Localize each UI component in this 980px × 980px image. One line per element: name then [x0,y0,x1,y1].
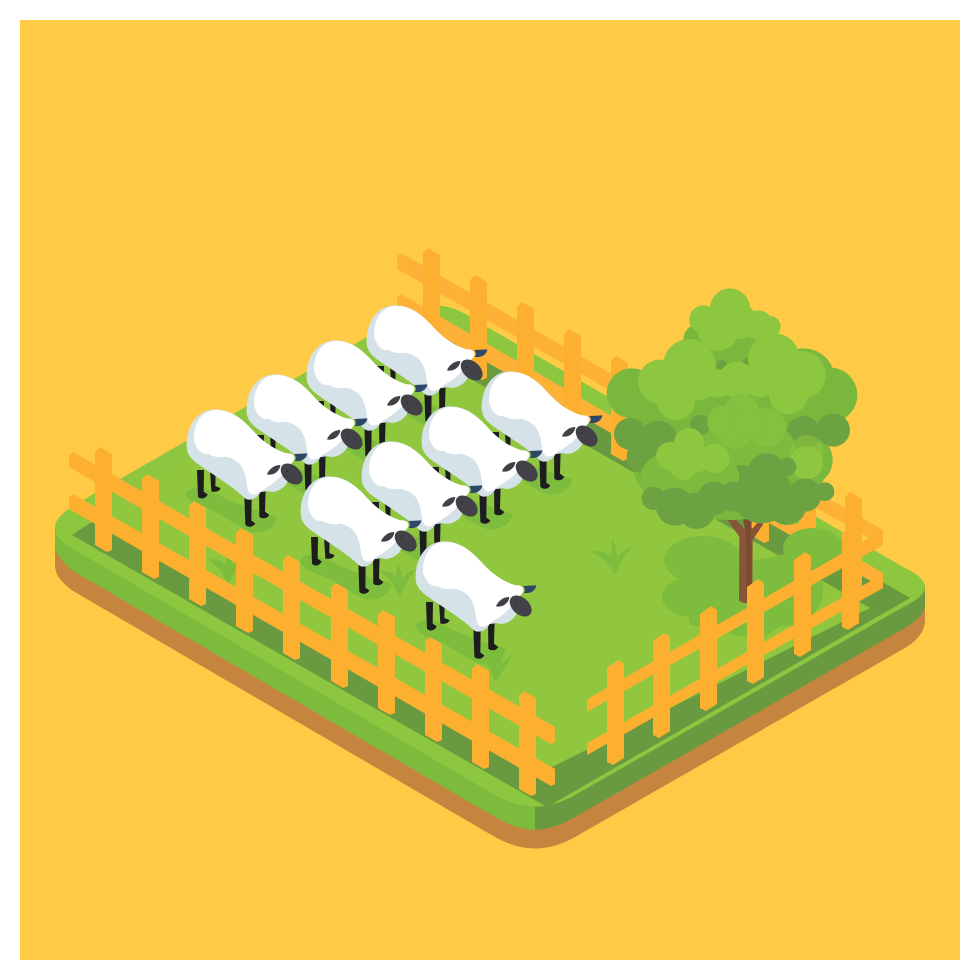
sheep 1, back row [366,305,487,429]
sheep 2, back row [306,340,427,464]
front left fence [69,447,555,796]
back fence [397,248,883,597]
canopy dark lower left [614,358,850,473]
canopy back layer [607,323,857,520]
sheep 8, middle row [300,476,421,600]
left grass side [55,528,535,830]
sheep 3, back row [246,374,367,498]
canopy dark right clump [723,453,834,525]
tree [607,288,857,603]
tree trunk [725,508,763,603]
raised pasture field [95,328,870,776]
sheep 9, front [415,541,536,665]
platform: isometric ground block [55,305,925,849]
canopy centre clump [702,394,823,479]
right grass side [535,585,925,830]
sheep 4, back row [186,409,307,533]
sheep 6, middle row [421,406,542,530]
canopy light middle clumps [638,333,826,420]
sheep 5, middle row [481,371,602,495]
tree ground shadow [662,528,843,640]
soil layer [55,528,925,848]
front right fence [587,525,883,765]
grass tufts [208,540,633,682]
grass rim [55,305,925,806]
sheep 7, middle row [361,441,482,565]
sunken dark wall [72,311,910,807]
canopy light top clump [689,288,781,351]
canopy front left clump [641,428,748,529]
